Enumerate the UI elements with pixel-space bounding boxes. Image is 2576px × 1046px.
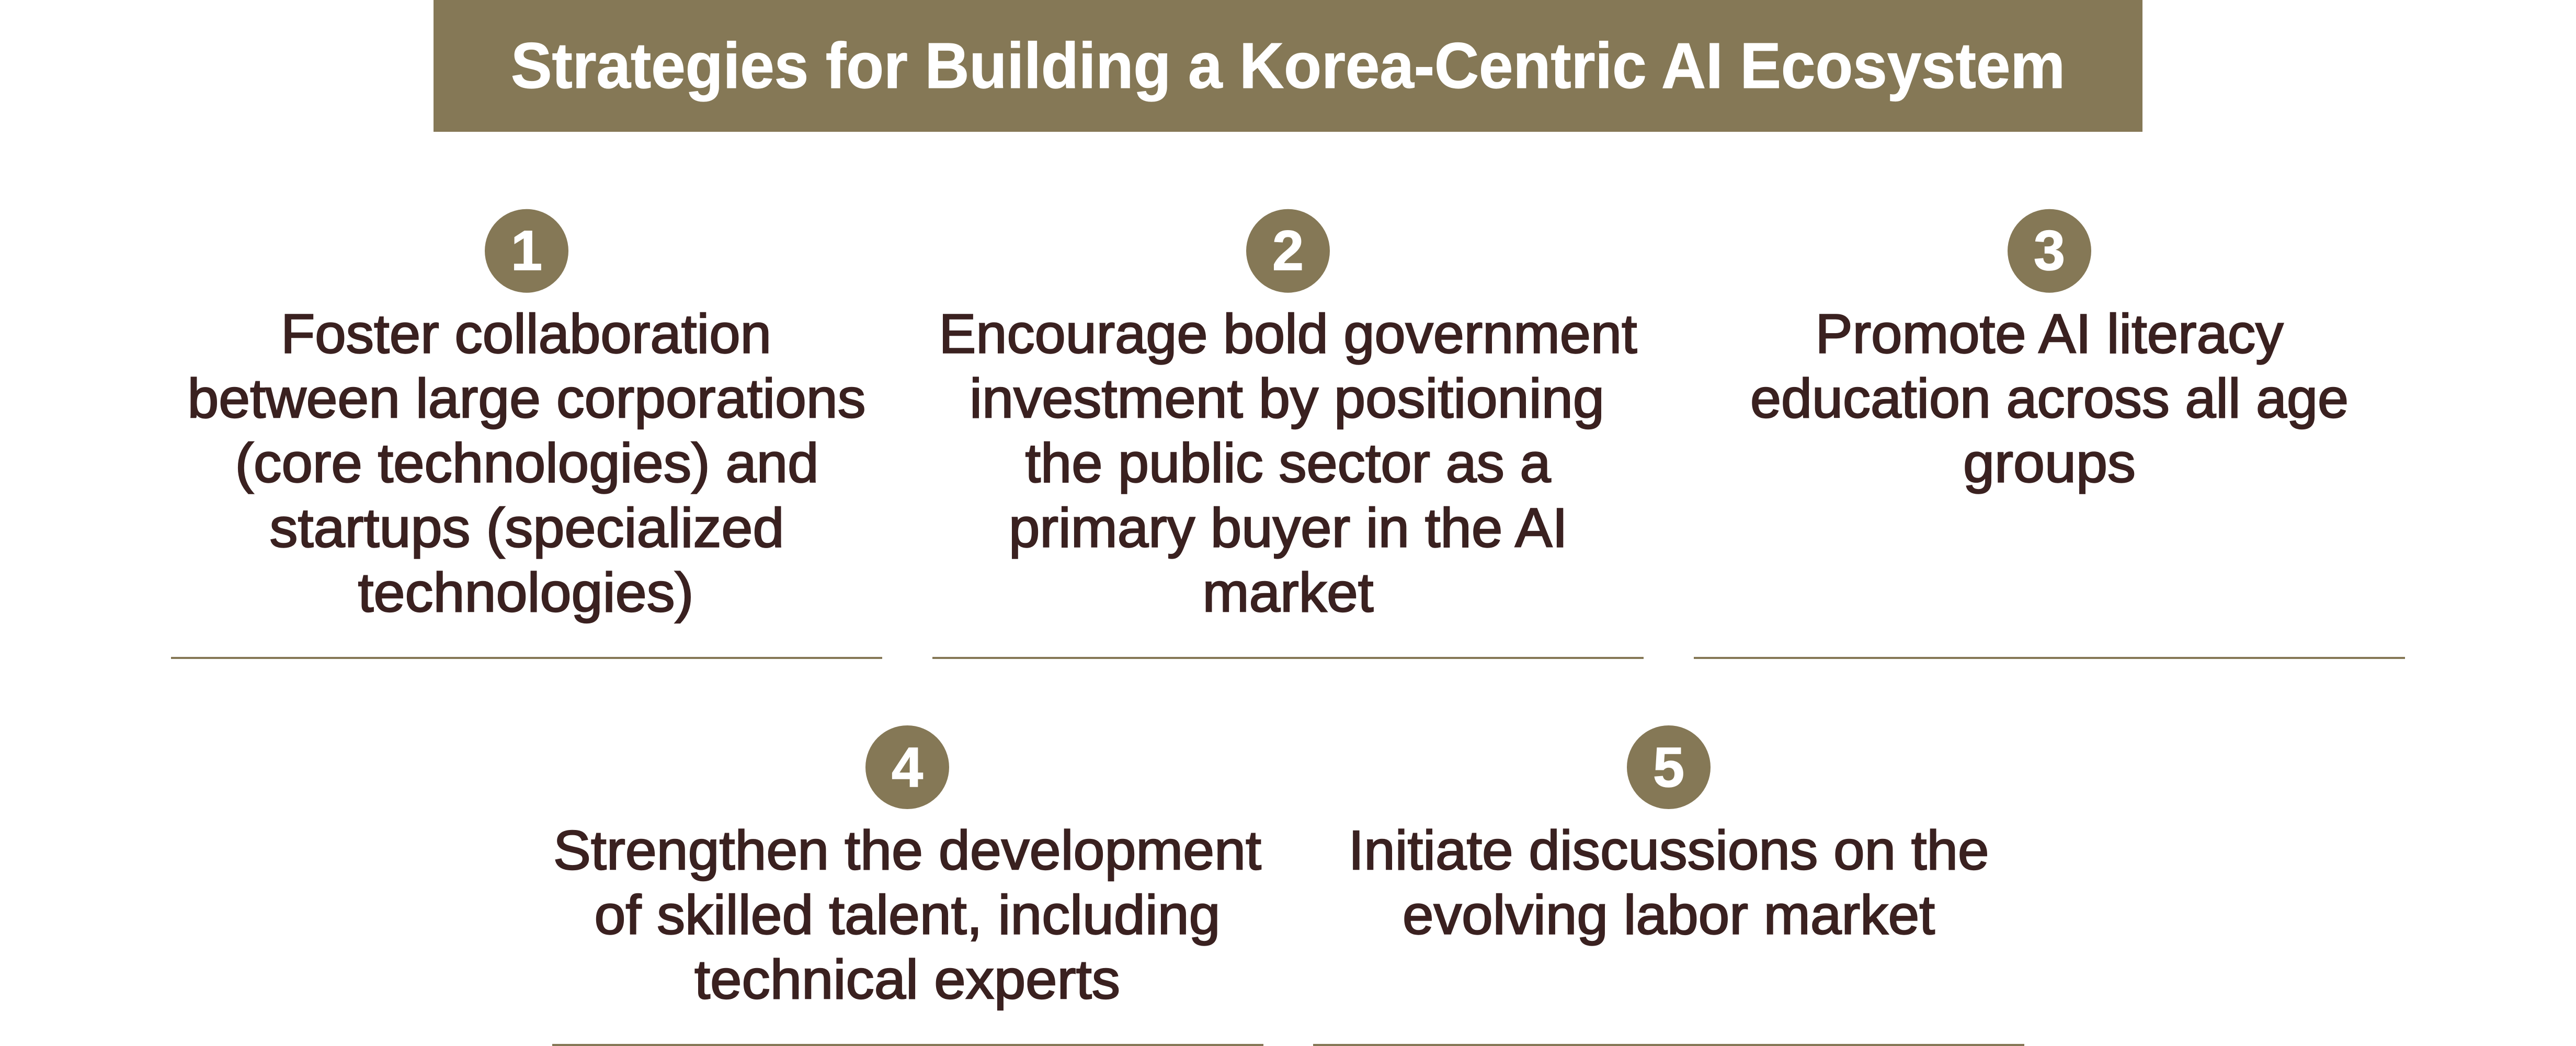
title banner: Strategies for Building a Korea-Centric AI Ecosystem [511,30,2065,102]
text: strategy 1: startups (specialized [270,497,784,559]
divider 4 [552,1044,1263,1046]
panel: strategy 4 [552,725,1263,1046]
title banner [434,0,2142,132]
panel: strategy 3 [1694,209,2405,659]
number badge 5: 5 [1653,735,1684,799]
text: strategy 2: market [1203,562,1373,623]
text: strategy 2 [939,303,1637,623]
number badge 3 [2008,209,2091,293]
text: strategy 5: evolving labor market [1403,884,1935,946]
number badge 4: 4 [892,735,923,799]
text: strategy 1: technologies) [358,562,693,623]
text: strategy 5: Initiate discussions on the [1348,820,1989,881]
number badge 4 [865,725,949,809]
number badge 3: 3 [2034,219,2065,282]
divider 3 [1694,657,2405,659]
text: strategy 4: technical experts [694,949,1120,1010]
number badge 1: 1 [511,219,542,282]
text: strategy 3: Promote AI literacy [1816,303,2283,365]
text: strategy 3: groups [1963,433,2136,494]
text: strategy 4: Strengthen the development [553,820,1261,881]
divider 2 [932,657,1644,659]
number badge 2 [1246,209,1330,293]
panel: strategy 2 [932,209,1644,659]
number badge 5 [1627,725,1711,809]
number badge 1 [485,209,568,293]
panel: strategy 1 [171,209,882,659]
text: strategy 3 [1750,303,2349,494]
text: strategy 1: Foster collaboration [281,303,771,365]
text: strategy 4: of skilled talent, including [594,884,1221,946]
text: strategy 4 [553,820,1261,1010]
text: strategy 1: between large corporations [187,368,866,429]
text: strategy 2: the public sector as a [1025,433,1551,494]
text: strategy 3: education across all age [1750,368,2349,429]
divider 1 [171,657,882,659]
panel: strategy 5 [1313,725,2024,1046]
text: strategy 2: primary buyer in the AI [1009,497,1568,559]
divider 5 [1313,1044,2024,1046]
number badge 2: 2 [1272,219,1304,282]
text: strategy 1: (core technologies) and [235,433,819,494]
text: strategy 5 [1348,820,1989,946]
text: strategy 1 [187,303,866,623]
text: strategy 2: Encourage bold government [939,303,1637,365]
text: strategy 2: investment by positioning [970,368,1604,429]
